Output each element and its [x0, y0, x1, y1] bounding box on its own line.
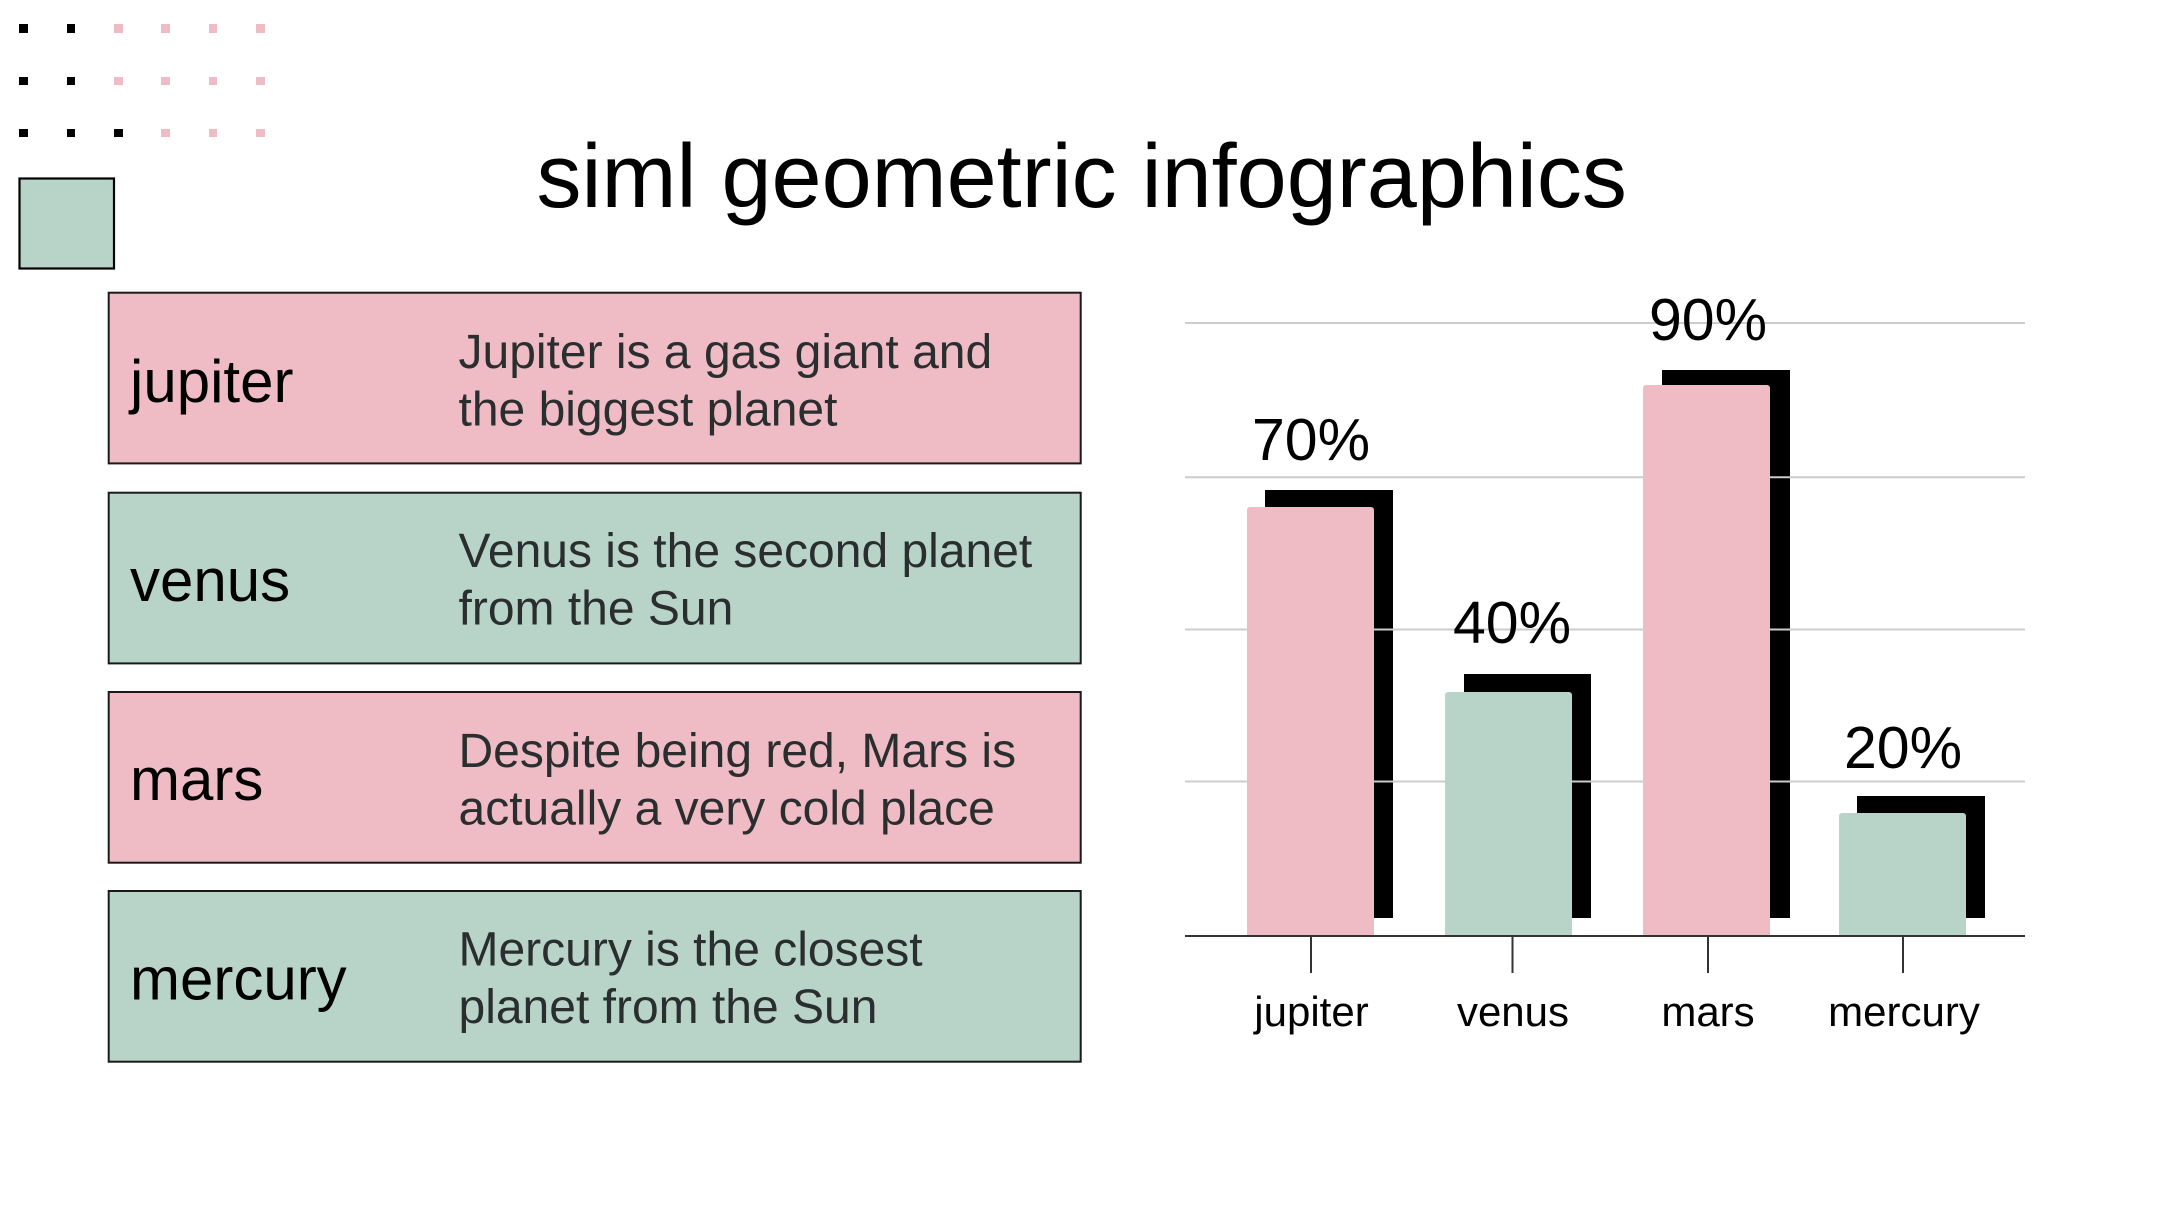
axis label: mercury: mercury [1828, 988, 1980, 1035]
axis and ticks [1185, 936, 2025, 973]
value: mars: 90% [1649, 287, 1767, 353]
decorative dot grid [19, 24, 265, 137]
mercury row background [109, 891, 1081, 1062]
bar shadows [1265, 370, 1985, 918]
venus description: from the Sun [458, 582, 733, 636]
panel: venus [109, 493, 1081, 663]
bar chart [1185, 287, 2025, 1035]
jupiter description: the biggest planet [458, 384, 837, 436]
axis label: mars: mars [1661, 988, 1755, 1035]
title: siml geometric infographics [536, 127, 1627, 227]
bar: venus [1445, 692, 1572, 936]
mercury name: mercury [130, 946, 347, 1012]
mars row background [109, 692, 1081, 863]
venus row background [109, 493, 1081, 663]
value: venus: 40% [1453, 590, 1571, 656]
bar: jupiter [1247, 507, 1374, 936]
axis label: venus: venus [1457, 988, 1569, 1035]
bar: mercury [1839, 813, 1966, 936]
axis label: jupiter: jupiter [1252, 988, 1369, 1035]
mars description: actually a very cold place [458, 782, 995, 836]
jupiter row background [109, 293, 1081, 463]
value: mercury: 20% [1844, 715, 1962, 781]
venus description: Venus is the second planet [458, 525, 1032, 578]
jupiter name: jupiter [128, 348, 293, 415]
mercury description: Mercury is the closest [458, 924, 923, 976]
mars name: mars [130, 746, 263, 813]
panel: jupiter [109, 293, 1081, 463]
panel: mars [109, 692, 1081, 863]
venus name: venus [130, 547, 290, 614]
green square accent [20, 178, 114, 268]
mars description: Despite being red, Mars is [458, 725, 1016, 778]
bar: mars [1643, 385, 1770, 936]
mercury description: planet from the Sun [458, 981, 877, 1034]
panel: mercury [109, 891, 1081, 1062]
value: jupiter: 70% [1252, 407, 1370, 473]
jupiter description: Jupiter is a gas giant and [458, 326, 992, 379]
